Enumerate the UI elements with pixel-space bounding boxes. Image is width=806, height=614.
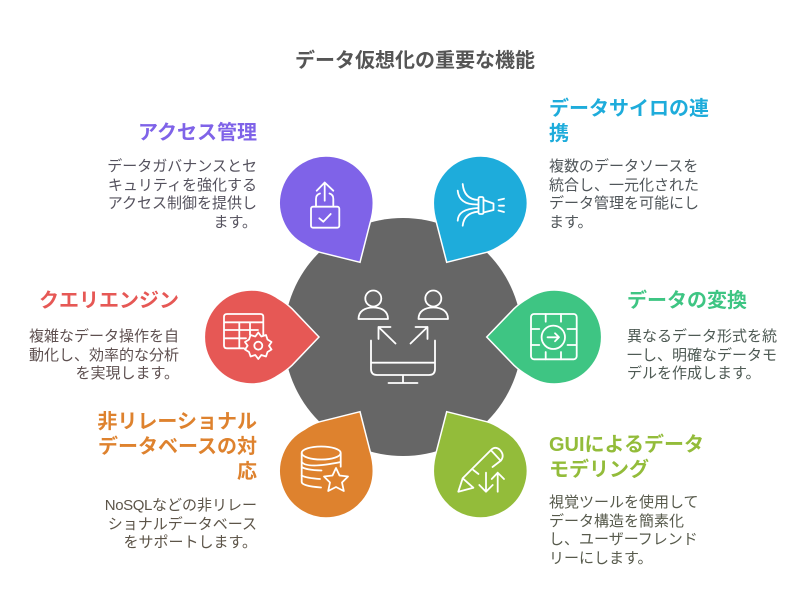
text: data transformation: 異なるデータ形式を統 (627, 328, 777, 345)
text: query engine: を実現します。 (75, 365, 179, 382)
text: non-relational database support (105, 497, 257, 551)
text: data silo integration: ます。 (549, 214, 593, 230)
text: GUI data modeling: データ構造を簡素化 (549, 512, 684, 530)
heading: data transformation: データの変換 (627, 290, 747, 312)
icon: lock with upload arrow (311, 182, 339, 228)
icon: database with star (302, 446, 348, 491)
text: GUI data modeling: し、ユーザーフレンド (549, 531, 698, 548)
text: data transformation: 一し、明確なデータモ (627, 346, 777, 364)
icon: cables into nozzle (458, 184, 504, 226)
heading: non-relational database support (97, 411, 257, 483)
drop: query engine (204, 290, 319, 384)
icon: users and monitor (358, 290, 448, 383)
text: GUI data modeling (549, 494, 699, 566)
text: access management (107, 158, 257, 230)
text: query engine (29, 328, 179, 382)
icon: chip with arrow (531, 314, 577, 359)
heading: GUI data modeling (549, 434, 704, 481)
drop: access management (279, 156, 373, 262)
heading: non-relational database support: 応 (237, 461, 257, 483)
text: data transformation (627, 328, 777, 382)
text: data silo integration (549, 158, 699, 230)
heading: GUI data modeling: GUIによるデータ (549, 434, 704, 456)
heading: non-relational database support: 非リレーショナル (97, 411, 257, 433)
text: data silo integration: データ管理を可能にし (549, 195, 699, 212)
text: access management: ます。 (213, 214, 257, 230)
text: data silo integration: 複数のデータソースを (549, 158, 698, 175)
text: non-relational database support: NoSQLなどの非リレー (105, 497, 257, 514)
heading: access management: アクセス管理 (138, 122, 257, 144)
text: data silo integration: 統合し、一元化された (549, 176, 699, 194)
heading: GUI data modeling: モデリング (549, 459, 649, 481)
icon: table with gear (224, 314, 272, 359)
text: access management: データガバナンスとセ (107, 158, 257, 175)
text: query engine: 動化し、効率的な分析 (29, 346, 179, 364)
text: non-relational database support: をサポートします。 (123, 534, 257, 551)
drop: data silo integration (433, 156, 527, 262)
icon: pencil with arrows (458, 448, 504, 492)
heading: data silo integration: データサイロの連 (549, 98, 709, 120)
drop: data transformation (487, 290, 602, 384)
text: GUI data modeling: 視覚ツールを使用して (549, 494, 699, 511)
text: GUI data modeling: リーにします。 (549, 550, 653, 566)
text: access management: キュリティを強化する (108, 176, 257, 194)
text: non-relational database support: ショナルデータベース (108, 516, 257, 532)
central hub circle (284, 218, 522, 456)
title: データ仮想化の重要な機能 (295, 50, 535, 72)
text: data transformation: デルを作成します。 (627, 365, 761, 382)
heading: data silo integration (549, 98, 709, 145)
heading: query engine: クエリエンジン (39, 290, 179, 312)
drop: non-relational database support (279, 412, 373, 518)
text: query engine: 複雑なデータ操作を自 (29, 328, 179, 345)
text: access management: アクセス制御を提供し (108, 195, 257, 212)
heading: non-relational database support: データベースの対 (98, 436, 257, 458)
drop: GUI data modeling (433, 412, 527, 518)
heading: data silo integration: 携 (549, 123, 569, 145)
